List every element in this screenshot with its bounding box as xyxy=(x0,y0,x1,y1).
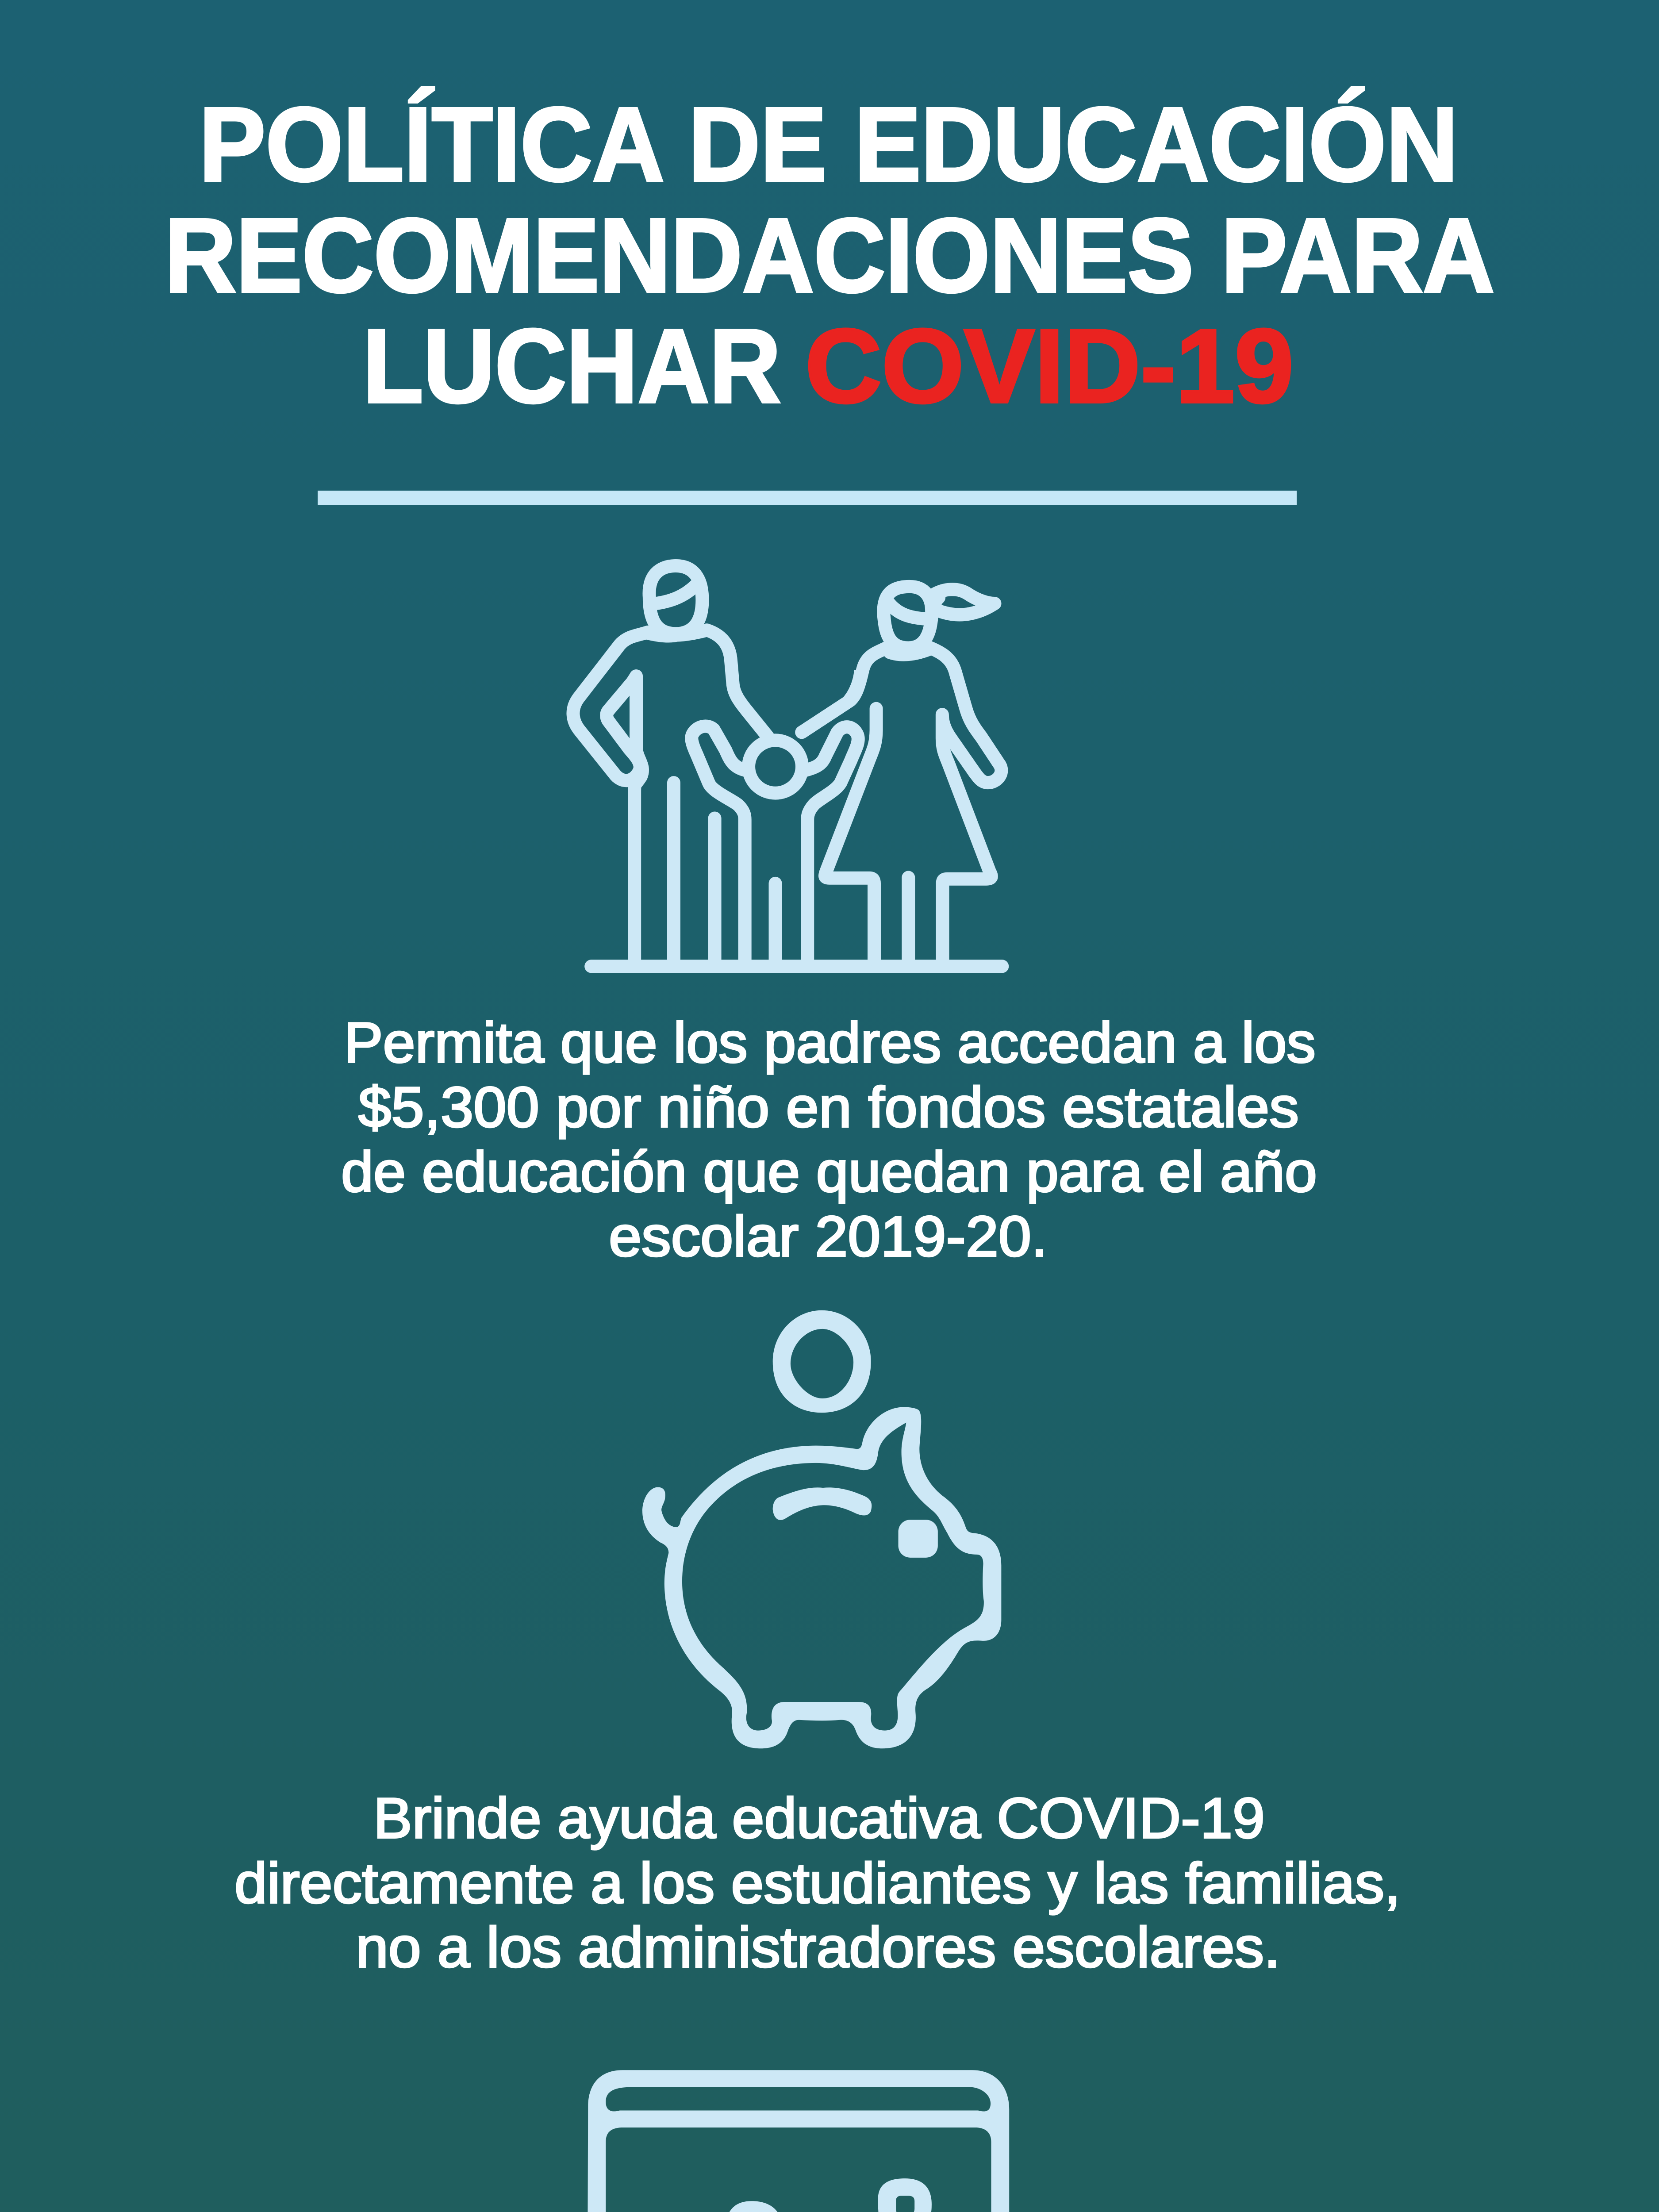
coin slot xyxy=(773,1487,872,1520)
line chart xyxy=(648,2178,932,2212)
text: parents funding: $5,300 por niño en fondos estatales xyxy=(358,1075,1299,1139)
title: LUCHAR xyxy=(363,307,781,425)
title: POLÍTICA DE EDUCACIÓN xyxy=(199,86,1458,203)
text: parents funding: Permita que los padres accedan a los xyxy=(344,1011,1316,1075)
title: COVID-19 xyxy=(805,307,1294,425)
text: direct aid xyxy=(234,1786,1401,1979)
title xyxy=(165,86,1494,425)
text: parents funding xyxy=(341,1011,1317,1268)
text: parents funding: de educación que quedan para el año xyxy=(341,1140,1317,1204)
title divider xyxy=(318,491,1297,505)
ground line xyxy=(591,960,1002,973)
icon: piggy bank with coin xyxy=(642,1310,1001,1748)
pig body and tail xyxy=(642,1407,1001,1748)
child figure xyxy=(691,726,858,960)
man figure xyxy=(573,566,768,960)
coin xyxy=(773,1310,871,1413)
text: direct aid: no a los administradores escolares. xyxy=(356,1916,1280,1979)
text: direct aid: directamente a los estudiantes y las familias, xyxy=(234,1851,1401,1915)
title: RECOMENDACIONES PARA xyxy=(165,197,1494,314)
icon: family xyxy=(573,566,1002,966)
woman arm fill xyxy=(829,670,864,710)
icon: computer monitor with chart xyxy=(587,2070,1009,2212)
woman figure xyxy=(802,587,1001,960)
monitor frame xyxy=(587,2070,1009,2212)
text: parents funding: escolar 2019-20. xyxy=(609,1205,1048,1268)
text: direct aid: Brinde ayuda educativa COVID-19 xyxy=(373,1786,1265,1850)
eye xyxy=(899,1520,938,1558)
